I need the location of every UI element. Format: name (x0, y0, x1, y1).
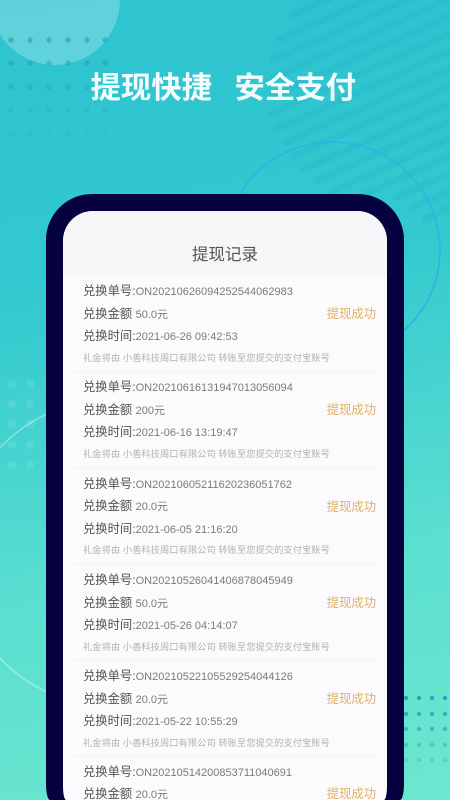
title (90, 71, 356, 105)
record 4: 兑换时间:2021-05-26 04:14:07 (83, 618, 238, 632)
screen header: 提现记录 (192, 246, 258, 264)
record 3: 兑换时间:2021-06-05 21:16:20 (83, 522, 238, 536)
record 5: 礼金将由 小善科技周口有限公司 转账至您提交的支付宝账号 (83, 738, 330, 748)
record 4: 提现成功 (327, 596, 376, 610)
record 2 (75, 380, 376, 468)
record 5: 兑换时间:2021-05-22 10:55:29 (83, 714, 238, 728)
record 2: 提现成功 (327, 403, 376, 417)
record 3: 提现成功 (327, 500, 376, 514)
light circle top left (0, 0, 120, 65)
faint dots left (8, 380, 34, 469)
record 3 (75, 477, 376, 565)
record 3: 兑换单号:ON20210605211620236051762 (83, 477, 292, 491)
phone screen (63, 211, 387, 800)
record 1: 提现成功 (327, 307, 376, 321)
diagonal stripes top right (272, 0, 450, 219)
record 1: 兑换金额 50.0元 (83, 306, 168, 320)
record 2: 礼金将由 小善科技周口有限公司 转账至您提交的支付宝账号 (83, 449, 330, 459)
record 2: 兑换金额 200元 (83, 403, 165, 417)
record 2: 兑换单号:ON20210616131947013056094 (83, 380, 293, 394)
record 4: 兑换单号:ON20210526041406878045949 (83, 573, 293, 587)
record 4 (75, 573, 376, 661)
record 3: 礼金将由 小善科技周口有限公司 转账至您提交的支付宝账号 (83, 545, 330, 555)
record 1: 兑换单号:ON20210626094252544062983 (83, 284, 293, 298)
record 1: 礼金将由 小善科技周口有限公司 转账至您提交的支付宝账号 (83, 352, 330, 362)
record 1 (75, 284, 376, 372)
screen header (63, 211, 387, 276)
record 6: 兑换单号:ON20210514200853711040691 (83, 765, 292, 779)
record 6 (83, 765, 376, 800)
record 3: 兑换金额 20.0元 (83, 499, 168, 513)
record 4: 礼金将由 小善科技周口有限公司 转账至您提交的支付宝账号 (83, 642, 330, 652)
title: 安全支付 (234, 71, 356, 105)
record 2: 兑换时间:2021-06-16 13:19:47 (83, 425, 238, 439)
white ring left (0, 400, 264, 706)
phone frame (46, 194, 404, 800)
record 5 (75, 669, 376, 757)
dot grid top left (8, 37, 108, 137)
title: 提现快捷 (90, 71, 212, 105)
record 4: 兑换金额 50.0元 (83, 596, 168, 610)
dot grid bottom right (404, 696, 447, 762)
record 1: 兑换时间:2021-06-26 09:42:53 (83, 329, 238, 343)
record 5: 兑换金额 20.0元 (83, 692, 168, 706)
blue ring (224, 142, 440, 358)
record 5: 兑换单号:ON20210522105529254044126 (83, 669, 293, 683)
record 5: 提现成功 (327, 692, 376, 706)
